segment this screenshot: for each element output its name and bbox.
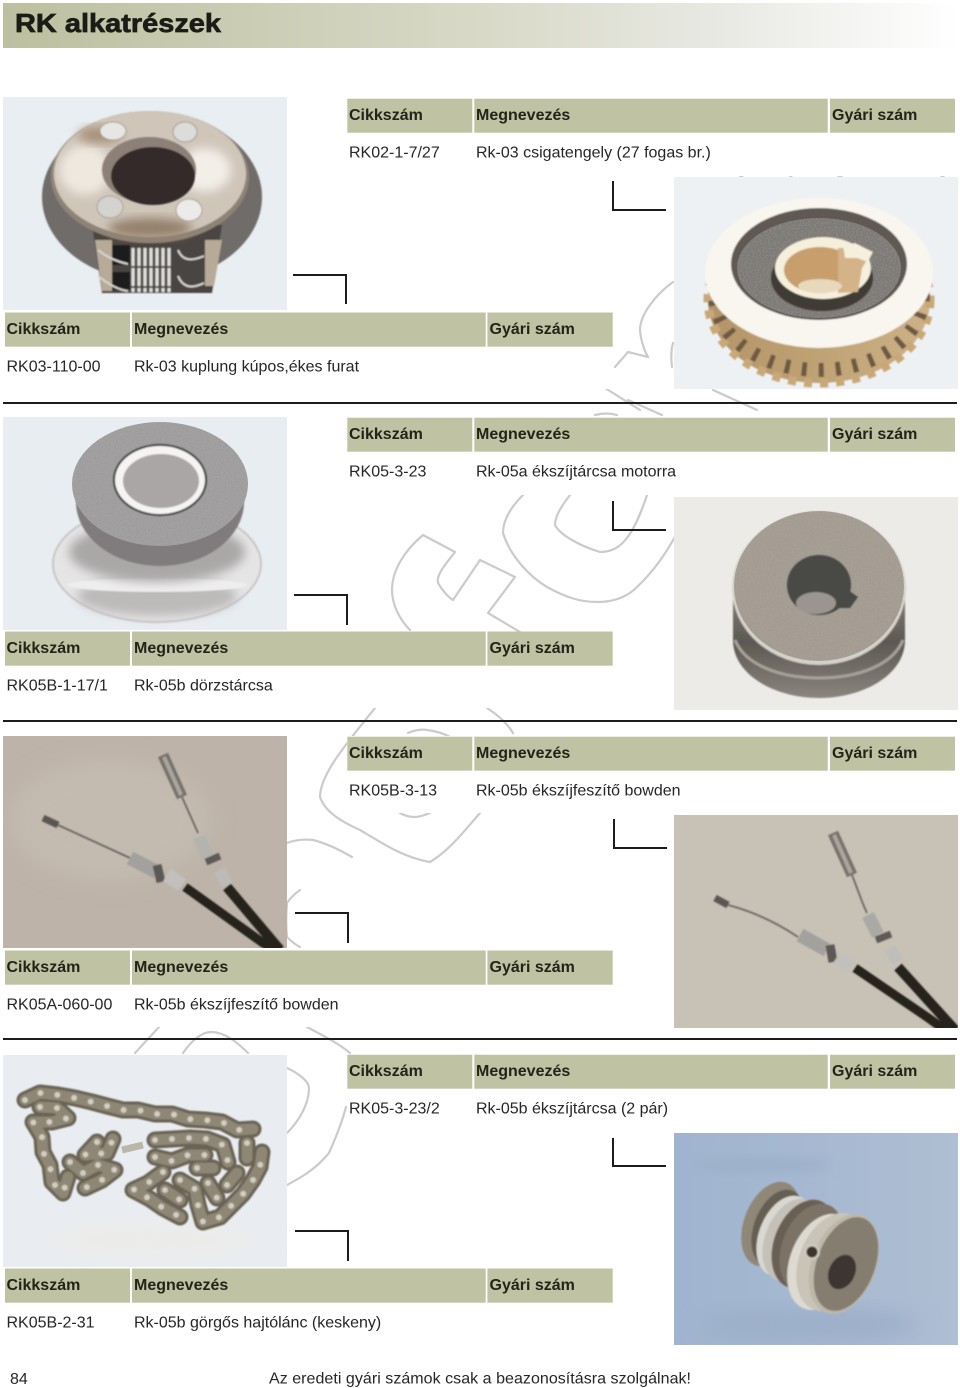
bracket: corner mark right [613,501,666,530]
table: RK03-110-00: Cikkszám [6,321,80,338]
table: RK05B-3-13: Megnevezés [476,745,570,762]
divider [3,1038,957,1040]
photo: bowden cable right [674,815,958,1030]
table: RK05B-1-17/1: Rk-05b dörzstárcsa [134,678,273,694]
photo: worm gear [674,177,958,389]
table: RK05-3-23 [347,418,957,495]
bracket: corner mark left [293,275,346,304]
table: RK05A-060-00: Rk-05b ékszíjfeszítő bowden [134,996,339,1014]
table: RK05-3-23: Megnevezés [476,426,570,443]
table: RK05B-2-31: Gyári szám [490,1277,575,1294]
table: RK05-3-23/2: Rk-05b ékszíjtárcsa (2 pár) [476,1100,668,1118]
table: RK03-110-00: Megnevezés [134,321,228,338]
table: RK05-3-23: Gyári szám [832,426,917,443]
table: RK05B-3-13: Gyári szám [832,745,917,762]
bracket: corner mark left [295,1231,348,1261]
table: RK05B-3-13: Rk-05b ékszíjfeszítő bowden [476,782,681,800]
bracket: corner mark right [613,1138,666,1166]
table: RK03-110-00: RK03-110-00 [6,358,101,376]
table: RK05B-3-13: Cikkszám [349,745,423,762]
page number: 84 [10,1371,28,1388]
bracket: corner mark right [614,819,667,848]
table: RK05A-060-00: RK05A-060-00 [6,996,112,1014]
table: RK05-3-23/2: Megnevezés [476,1063,570,1080]
bracket: corner mark right [613,181,666,210]
photo: stepped pulley [674,1133,958,1345]
title bar: RK alkatrészek [15,8,222,38]
table: RK02-1-7/27: Megnevezés [476,107,570,124]
table: RK05B-1-17/1: RK05B-1-17/1 [6,678,108,694]
table: RK05-3-23/2: Cikkszám [349,1063,423,1080]
photo: pulley [674,497,958,710]
table: RK05B-1-17/1 [5,632,613,708]
table: RK05-3-23/2: RK05-3-23/2 [349,1100,440,1118]
table: RK02-1-7/27 [347,99,957,176]
table: RK05B-1-17/1: Megnevezés [134,640,228,657]
divider [3,720,957,722]
table: RK05B-2-31: Rk-05b görgős hajtólánc (keskeny) [134,1314,381,1332]
footer note: Az eredeti gyári számok csak a beazonosításra szolgálnak! [269,1370,691,1388]
table: RK05A-060-00 [5,950,613,1027]
table: RK05-3-23: Rk-05a ékszíjtárcsa motorra [476,464,676,480]
table: RK05B-2-31: Megnevezés [134,1277,228,1294]
table: RK05B-1-17/1: Gyári szám [490,640,575,657]
table: RK03-110-00: Gyári szám [490,321,575,338]
table: RK05-3-23/2: Gyári szám [832,1063,917,1080]
table: RK03-110-00 [5,312,613,389]
watermark: outlined logo letters [135,173,945,1185]
table: RK02-1-7/27: Gyári szám [832,107,917,124]
table: RK05B-3-13: RK05B-3-13 [349,782,437,800]
table: RK05B-3-13 [347,736,957,813]
title bar [3,3,960,48]
photo: friction disc [3,417,287,630]
table: RK02-1-7/27: Cikkszám [349,107,423,124]
table: RK05B-2-31: RK05B-2-31 [6,1314,95,1332]
table: RK02-1-7/27: RK02-1-7/27 [349,144,440,162]
table: RK03-110-00: Rk-03 kuplung kúpos,ékes furat [134,358,360,376]
divider [3,402,957,404]
table: RK05A-060-00: Megnevezés [134,959,228,976]
bracket: corner mark left [294,595,347,625]
table: RK05-3-23/2 [347,1054,957,1131]
table: RK05B-1-17/1: Cikkszám [6,640,80,657]
table: RK02-1-7/27: Rk-03 csigatengely (27 fogas br.) [476,144,711,162]
table: RK05B-2-31: Cikkszám [6,1277,80,1294]
table: RK05-3-23: Cikkszám [349,426,423,443]
photo: roller chain [3,1055,287,1267]
photo: bowden cable left [3,736,287,950]
bracket: corner mark left [295,913,348,943]
table: RK05-3-23: RK05-3-23 [349,464,426,480]
table: RK05B-2-31 [5,1268,613,1345]
photo: clutch [3,97,287,310]
table: RK05A-060-00: Cikkszám [6,959,80,976]
table: RK05A-060-00: Gyári szám [490,959,575,976]
